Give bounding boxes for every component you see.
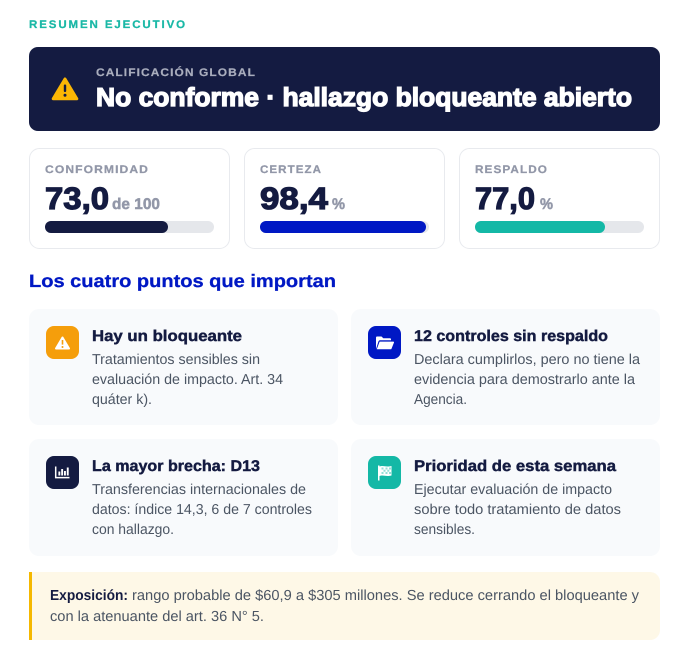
label: certeza: CERTEZA [260, 164, 322, 176]
value: 73,0 de 100: de 100 [112, 196, 160, 213]
card body: Ejecutar evaluación de impacto [414, 482, 612, 498]
panel: conformidad [30, 148, 230, 248]
panel: certeza [244, 148, 444, 248]
card title: 12 controles sin respaldo [414, 328, 608, 345]
callout text: con la atenuante del art. 36 N° 5. [50, 609, 264, 625]
card body: con hallazgo. [92, 522, 174, 538]
banner label: CALIFICACIÓN GLOBAL [96, 66, 256, 79]
value: 77,0 %: 77,0 [475, 181, 535, 216]
callout: exposicion [29, 572, 660, 640]
value: 73,0 de 100: 73,0 [45, 181, 109, 216]
callout text: rango probable de $60,9 a $305 millones. Se reduce cerrando el bloqueante y [132, 588, 640, 604]
progress bar: 77 percent [475, 221, 644, 233]
card body: sobre todo tratamiento de datos [414, 502, 621, 518]
card title: Prioridad de esta semana [414, 458, 616, 475]
card body: datos: índice 14,3, 6 de 7 controles [92, 502, 312, 518]
card body: sensibles. [414, 522, 475, 538]
callout text [50, 588, 640, 625]
panel: hay un bloqueante [29, 309, 338, 425]
card title: Hay un bloqueante [92, 328, 242, 345]
eyebrow: resumen ejecutivo: RESUMEN EJECUTIVO [29, 19, 187, 31]
panel: la mayor brecha [29, 439, 338, 556]
card body [414, 352, 640, 408]
panel: global rating banner [29, 47, 660, 131]
label: conformidad: CONFORMIDAD [45, 164, 149, 176]
icon: open folder [368, 326, 401, 359]
card body [414, 482, 621, 538]
progress bar: 73 percent [45, 221, 214, 233]
banner headline: No conforme · hallazgo bloqueante abierto [96, 82, 632, 112]
icon: checkered flag [368, 456, 401, 489]
card body: evaluación de impacto. Art. 34 [92, 372, 283, 388]
value: 77,0 %: % [540, 196, 553, 213]
panel: respaldo [460, 148, 660, 248]
progress bar: 98.4 percent [260, 221, 429, 233]
icon: bar chart [46, 456, 79, 489]
value: 98,4 %: 98,4 [260, 181, 329, 216]
section heading: Los cuatro puntos que importan [29, 271, 336, 291]
card body [92, 482, 312, 538]
card body: Transferencias internacionales de [92, 482, 306, 498]
card body: quáter k). [92, 392, 152, 408]
panel: prioridad de esta semana [351, 439, 660, 556]
icon: warning on orange [46, 326, 79, 359]
card title: La mayor brecha: D13 [92, 458, 260, 475]
card body [92, 352, 283, 408]
value: 98,4 %: % [332, 196, 345, 213]
value: 73,0 de 100 [45, 181, 160, 216]
card body: Agencia. [414, 392, 467, 408]
icon: warning triangle [53, 79, 77, 99]
card body: evidencia para demostrarlo ante la [414, 372, 635, 388]
card body: Declara cumplirlos, pero no tiene la [414, 352, 640, 368]
card body: Tratamientos sensibles sin [92, 352, 260, 368]
callout text: Exposición: [50, 588, 128, 604]
panel: 12 controles sin respaldo [351, 309, 660, 425]
label: respaldo: RESPALDO [475, 164, 548, 176]
